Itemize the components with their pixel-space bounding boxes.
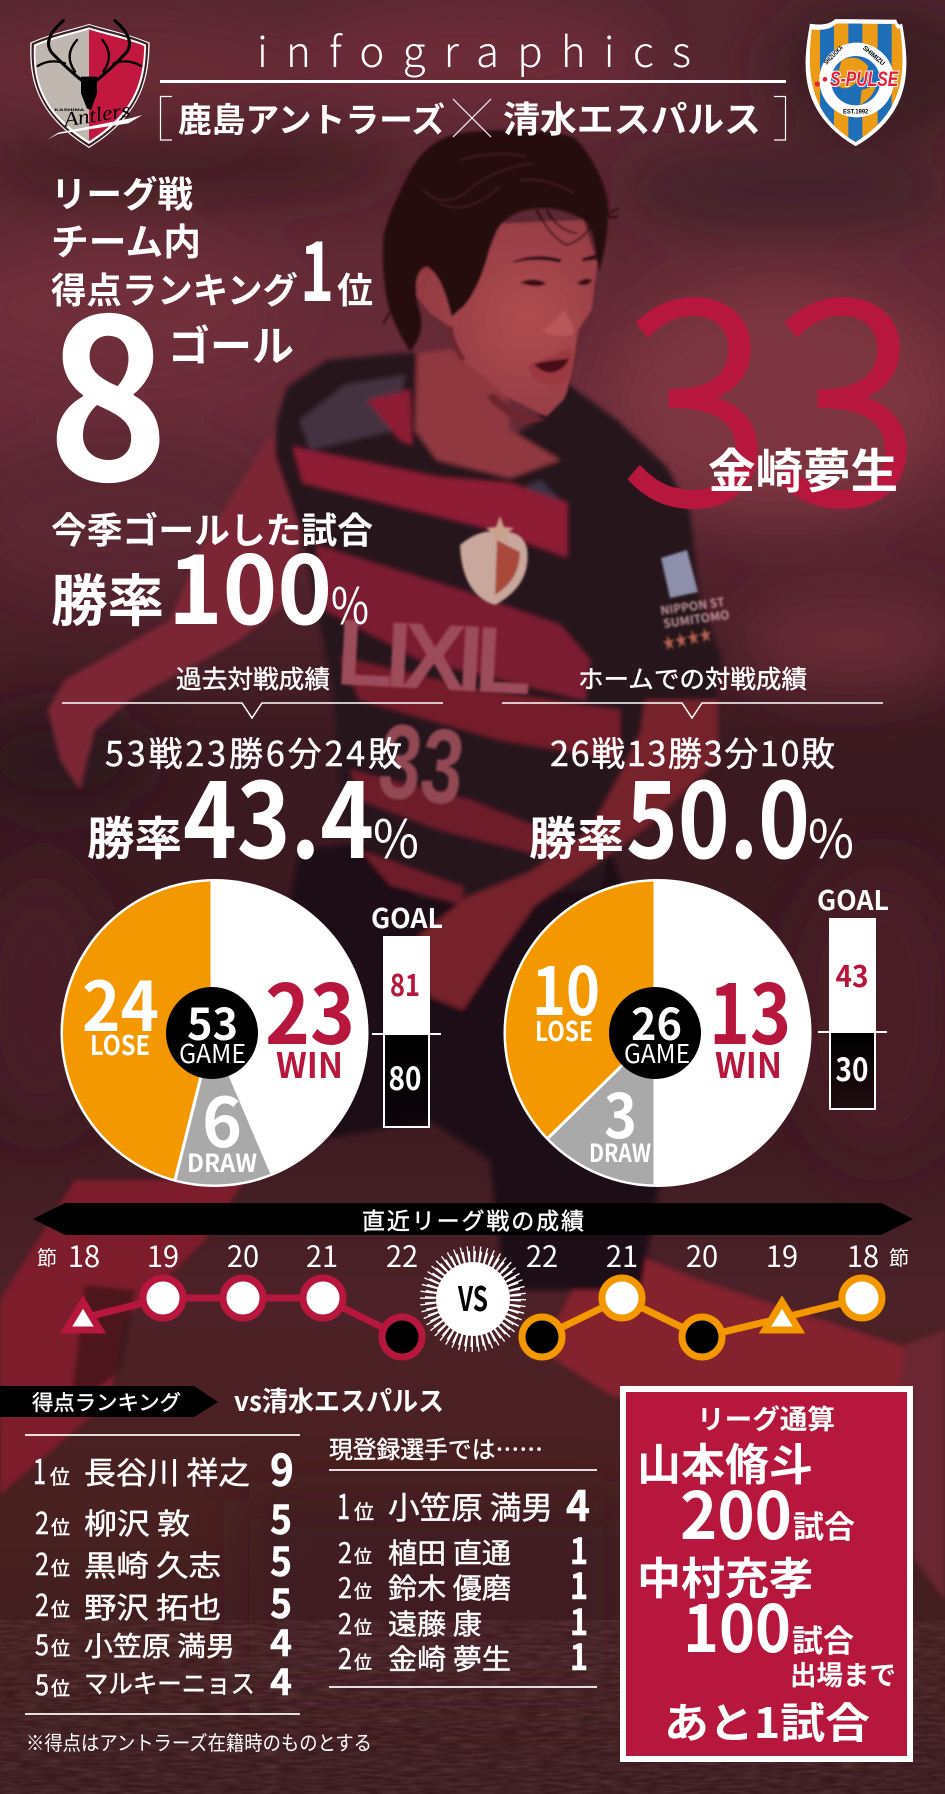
footnote: ※得点はアントラーズ在籍時のものとする (26, 1727, 372, 1756)
ranking table: all time: マルキーニョス (84, 1664, 255, 1701)
timeline: Kashima recent form: 20 (227, 1234, 259, 1276)
timeline: Shimizu recent form: 21 (606, 1234, 638, 1276)
pie chart: home: GAME (624, 1034, 690, 1071)
timeline: Kashima recent form: 節 (37, 1242, 57, 1271)
ranking table: all time: 位 (50, 1461, 70, 1490)
win rate in scoring matches: 勝率 (51, 557, 164, 638)
icon: Kashima Antlers crest (30, 21, 150, 148)
icon: Shimizu S-Pulse crest: SHIZUOKA (823, 44, 845, 66)
team scoring rank block: 位 (337, 262, 373, 314)
goal bar: all-time (371, 897, 443, 1127)
panel: home head to head: ホームでの対戦成績 (578, 660, 807, 696)
ranking table: all time: 5 (35, 1624, 49, 1664)
pie chart: home: WIN (715, 1038, 782, 1089)
ranking table: current squad: 2 (338, 1603, 352, 1643)
callout: league appearance milestones: 試合 (792, 1616, 854, 1661)
banner: recent league results (33, 1202, 913, 1236)
icon: Shimizu S-Pulse crest: EST.1992 (843, 108, 869, 115)
ranking table: current squad: 1 (570, 1629, 588, 1681)
pie chart: home: DRAW (589, 1134, 651, 1170)
goal bar: all-time: 81 (390, 961, 420, 1005)
pie chart: all-time: 24 (82, 952, 159, 1051)
pie chart: home: 10 (532, 939, 600, 1035)
timeline: Kashima recent form: 19 (147, 1234, 179, 1276)
team scoring rank block: チーム内 (51, 212, 201, 266)
ranking table: all time: 5 (35, 1664, 49, 1704)
left leg shape (0, 1180, 245, 1495)
ranking table: current squad: 2 (338, 1532, 352, 1572)
title (160, 19, 786, 143)
ranking heading tag: vs清水エスパルス (234, 1380, 444, 1419)
ranking table: all time: 4 (270, 1654, 292, 1706)
panel: all-time head to head: 勝率 (87, 803, 182, 869)
pie chart: all-time: 53 (187, 989, 238, 1053)
ranking table: all time (25, 1434, 300, 1715)
ranking table: current squad: 遠藤 康 (388, 1603, 482, 1643)
ranking table: all time: 5 (270, 1488, 292, 1546)
ranking table: all time: 2 (35, 1499, 49, 1543)
ranking table: all time: 1 (33, 1445, 46, 1494)
title: infographics (257, 19, 691, 80)
goal bar: home: 30 (836, 1045, 868, 1091)
timeline: Shimizu recent form: 20 (686, 1234, 718, 1276)
ranking table: current squad: 4 (566, 1473, 590, 1534)
team scoring rank block: 1 (300, 209, 334, 325)
panel: home head to head: % (808, 798, 854, 874)
ranking table: all time: 位 (51, 1595, 70, 1622)
icon: VS starburst (423, 1249, 523, 1349)
ranking table: all time: 位 (51, 1513, 70, 1540)
ranking table: all time: 野沢 拓也 (84, 1585, 221, 1627)
win rate in scoring matches: 100 (168, 516, 332, 652)
callout: league appearance milestones: 200 (680, 1464, 792, 1558)
background photo: player running: 33 (374, 702, 469, 828)
ranking table: current squad (329, 1430, 597, 1688)
ranking table: all time: 2 (35, 1581, 49, 1625)
banner: recent league results: 直近リーグ戦の成績 (362, 1202, 584, 1236)
ranking table: current squad: 位 (354, 1496, 374, 1525)
panel: home head to head (502, 660, 883, 888)
ranking table: current squad: 2 (338, 1567, 352, 1607)
ranking table: current squad: 金崎 夢生 (388, 1638, 511, 1678)
ranking table: current squad: 1 (570, 1558, 588, 1610)
shirt lettering: LIXIL (334, 599, 535, 714)
callout: league appearance milestones: 試合 (793, 1502, 855, 1547)
ranking table: all time: 位 (51, 1554, 70, 1581)
icon: Shimizu S-Pulse crest (806, 18, 906, 147)
panel: all-time head to head: 過去対戦成績 (176, 660, 330, 696)
pie chart: all-time: DRAW (187, 1144, 257, 1180)
goals count: 8 (47, 222, 169, 544)
team scoring rank block: リーグ戦 (51, 166, 193, 218)
timeline: Kashima recent form: 21 (306, 1234, 338, 1276)
timeline: Shimizu recent form: 19 (766, 1234, 798, 1276)
ranking table: all time: 4 (270, 1615, 292, 1667)
win rate in scoring matches: 今季ゴールした試合 (51, 502, 373, 554)
pie chart: home: LOSE (535, 1010, 593, 1049)
team scoring rank block (51, 166, 373, 325)
face, hair, ear (383, 130, 618, 423)
pie chart: all-time: LOSE (90, 1024, 150, 1063)
timeline: Kashima recent form: 22 (386, 1234, 418, 1276)
timeline: Kashima recent form (37, 1234, 422, 1357)
panel: home head to head: 26戦13勝3分10敗 (550, 727, 835, 776)
pie chart: home (504, 879, 812, 1187)
callout: league appearance milestones: 山本脩斗 (637, 1429, 813, 1493)
ranking table: current squad: 位 (354, 1578, 372, 1604)
goal bar: home (817, 879, 889, 1109)
callout: league appearance milestones: あと1試合 (664, 1690, 870, 1751)
ranking table: all time: 長谷川 祥之 (84, 1448, 250, 1493)
ranking heading tag: 得点ランキング (32, 1387, 181, 1417)
ranking table: current squad: 1 (570, 1523, 588, 1575)
panel: all-time head to head (62, 660, 443, 888)
background photo: player running: ★★★★ (660, 620, 714, 655)
pie chart: home: 13 (709, 949, 791, 1068)
ranking table: current squad: 鈴木 優磨 (388, 1567, 511, 1607)
ranking table: current squad: 小笠原 満男 (388, 1483, 553, 1528)
goals count: ゴール (168, 313, 294, 374)
goal bar: home: 43 (836, 952, 868, 996)
jersey number 33: 33 (622, 185, 920, 582)
panel: all-time head to head: % (373, 798, 419, 874)
pie chart: all-time (40, 860, 368, 1240)
pie chart: home: 3 (604, 1067, 637, 1156)
pie chart: home: 26 (631, 989, 682, 1053)
ranking heading tag (0, 1380, 444, 1419)
pie chart: all-time: 23 (265, 949, 355, 1068)
ranking table: all time: 5 (270, 1572, 292, 1630)
ranking table: all time: 9 (270, 1435, 294, 1499)
icon: Shimizu S-Pulse crest: SHIMIZU (861, 45, 886, 67)
ranking table: all time: 小笠原 満男 (84, 1625, 235, 1664)
timeline: Shimizu recent form (522, 1234, 909, 1357)
callout: league appearance milestones: 中村充孝 (637, 1543, 813, 1607)
ranking table: all time: 位 (51, 1634, 70, 1661)
icon: Kashima Antlers crest: KASHIMA (54, 108, 85, 112)
panel: all-time head to head: 43.4 (183, 737, 374, 888)
goal bar: home: GOAL (817, 879, 889, 918)
panel: home head to head: 50.0 (626, 737, 810, 888)
timeline: Shimizu recent form: 節 (889, 1242, 909, 1271)
pie chart: all-time: GAME (179, 1034, 246, 1071)
callout: league appearance milestones: 100 (683, 1577, 791, 1671)
win rate in scoring matches (51, 502, 373, 652)
title: 清水エスパルス (503, 91, 761, 143)
panel: all-time head to head: 53戦23勝6分24敗 (105, 727, 402, 776)
goals count (47, 222, 294, 544)
panel: home head to head: 勝率 (529, 803, 624, 869)
ranking table: all time: 位 (51, 1674, 70, 1701)
shirt crest, star and sponsor marks (460, 531, 528, 605)
callout: league appearance milestones: 出場まで (790, 1654, 896, 1693)
background photo: player running: NIPPON ST (659, 593, 726, 619)
pie chart: all-time: WIN (276, 1038, 343, 1089)
team scoring rank block: 得点ランキング (51, 262, 298, 314)
callout: league appearance milestones (623, 1389, 910, 1759)
ranking table: all time: 2 (35, 1540, 49, 1584)
pie chart: all-time: 6 (202, 1068, 242, 1167)
ranking table: current squad: 位 (354, 1614, 372, 1640)
title: 鹿島アントラーズ (178, 93, 445, 142)
goal bar: all-time: GOAL (371, 897, 443, 936)
win rate in scoring matches: % (331, 567, 369, 639)
ranking table: current squad: 2 (338, 1638, 352, 1678)
ranking table: all time: 柳沢 敦 (84, 1501, 190, 1543)
goal bar: all-time: 80 (388, 1054, 422, 1100)
ranking table: current squad: 1 (570, 1594, 588, 1646)
timeline: Kashima recent form: 18 (68, 1234, 100, 1276)
icon: VS starburst: VS (457, 1272, 488, 1321)
ranking table: current squad: 植田 直通 (388, 1532, 511, 1572)
timeline: Shimizu recent form: 18 (847, 1234, 879, 1276)
timeline: Shimizu recent form: 22 (526, 1234, 558, 1276)
player name: 金崎夢生 (708, 433, 898, 502)
background photo: player running: SUMITOMO (662, 606, 730, 632)
icon: Kashima Antlers crest: Antlers (60, 99, 132, 132)
ranking table: current squad: 位 (354, 1649, 372, 1675)
ranking table: current squad: 1 (337, 1480, 350, 1529)
ranking table: all time: 黒崎 久志 (84, 1543, 221, 1585)
ranking table: all time: 5 (270, 1530, 292, 1588)
callout: league appearance milestones: リーグ通算 (697, 1398, 835, 1437)
ranking table: current squad: 現登録選手では…… (329, 1430, 543, 1465)
icon: Shimizu S-Pulse crest: S-PULSE (830, 67, 899, 91)
ranking table: current squad: 位 (354, 1543, 372, 1569)
